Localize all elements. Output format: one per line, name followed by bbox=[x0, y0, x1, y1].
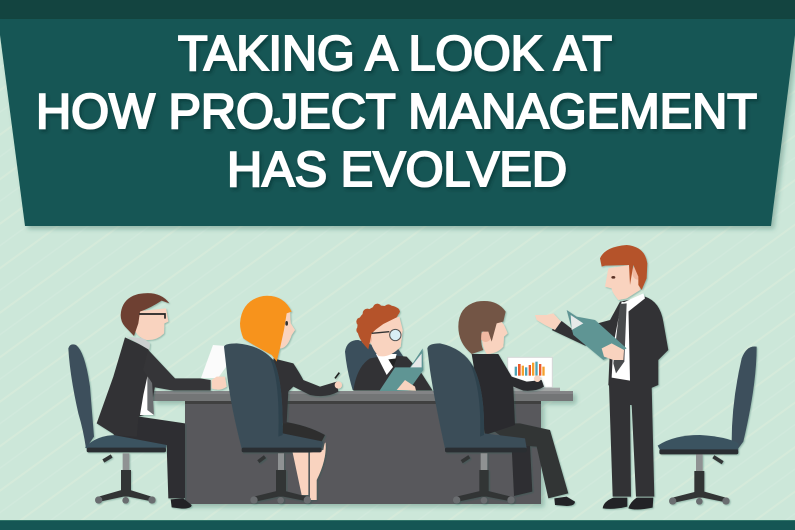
title bbox=[36, 27, 757, 197]
top band bbox=[0, 0, 795, 19]
title: HOW PROJECT MANAGEMENT bbox=[36, 85, 757, 139]
paper on the table bbox=[201, 345, 226, 378]
empty right chair bbox=[658, 346, 757, 505]
title banner bbox=[0, 19, 795, 226]
laptop with bar chart bbox=[508, 357, 560, 391]
seated woman with orange hair bbox=[224, 296, 342, 504]
title: TAKING A LOOK AT bbox=[178, 27, 612, 81]
seated person with brown hair bbox=[427, 301, 575, 506]
title: HAS EVOLVED bbox=[227, 143, 567, 197]
conference table bbox=[153, 391, 573, 504]
bottom band bbox=[0, 520, 795, 530]
standing man presenting with a book bbox=[535, 245, 668, 510]
seated man with curly hair behind the table bbox=[345, 304, 433, 391]
empty left chair and seated man bbox=[68, 293, 227, 509]
